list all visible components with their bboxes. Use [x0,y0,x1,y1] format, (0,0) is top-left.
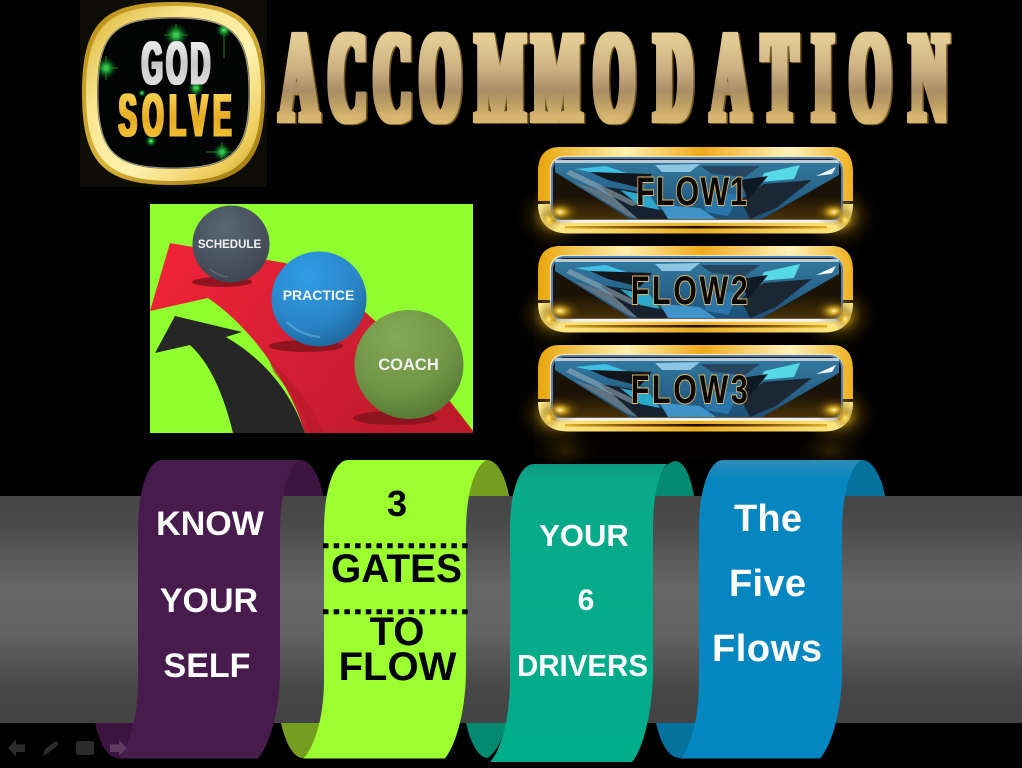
ball: coach [354,310,464,419]
band: 3 gates to flow: GATES [331,547,462,591]
band: your 6 drivers: YOUR [539,518,629,553]
band: the five flows: Five [729,563,806,605]
band: your 6 drivers: DRIVERS [517,648,648,683]
horizontal bar [0,496,1022,723]
button: flow 1 [516,147,878,250]
button: flow 3 [516,345,878,448]
band: 3 gates to flow: 3 [387,483,407,524]
button: flow 1: FLOW1 [636,169,747,214]
band: your 6 drivers [466,461,694,762]
ball: practice [272,252,366,346]
logo badge: God Solve [80,0,267,187]
band: 3 gates to flow [281,460,509,758]
band: know your self [95,460,323,758]
ball: coach: COACH [378,356,439,374]
title: ACCOMMODATION [280,6,947,149]
band: know your self: SELF [164,647,250,685]
logo word: GOD: GOD [142,30,210,97]
ball shadows [192,277,437,425]
button: flow 3: FLOW3 [631,367,748,412]
band: 3 gates to flow: TO [370,610,424,654]
band: the five flows: The [734,498,802,540]
band: know your self: YOUR [160,582,258,620]
ball: practice: PRACTICE [283,287,354,303]
band: 3 gates to flow: FLOW [339,645,457,689]
red arrow [150,243,473,433]
band: the five flows: Flows [712,628,822,670]
band: your 6 drivers: 6 [578,584,594,617]
band: the five flows [656,460,885,758]
panel: flow buttons [516,147,878,470]
toolbar icons [8,740,127,756]
band: know your self: KNOW [156,505,265,543]
ball: schedule: SCHEDULE [198,239,261,251]
ball: schedule [192,206,270,282]
button: flow 2 [516,246,878,349]
panel: schedule practice coach picture [150,204,473,433]
logo word: SOLVE: SOLVE [119,82,231,149]
button: flow 2: FLOW2 [631,268,748,313]
black arrow [155,316,305,433]
